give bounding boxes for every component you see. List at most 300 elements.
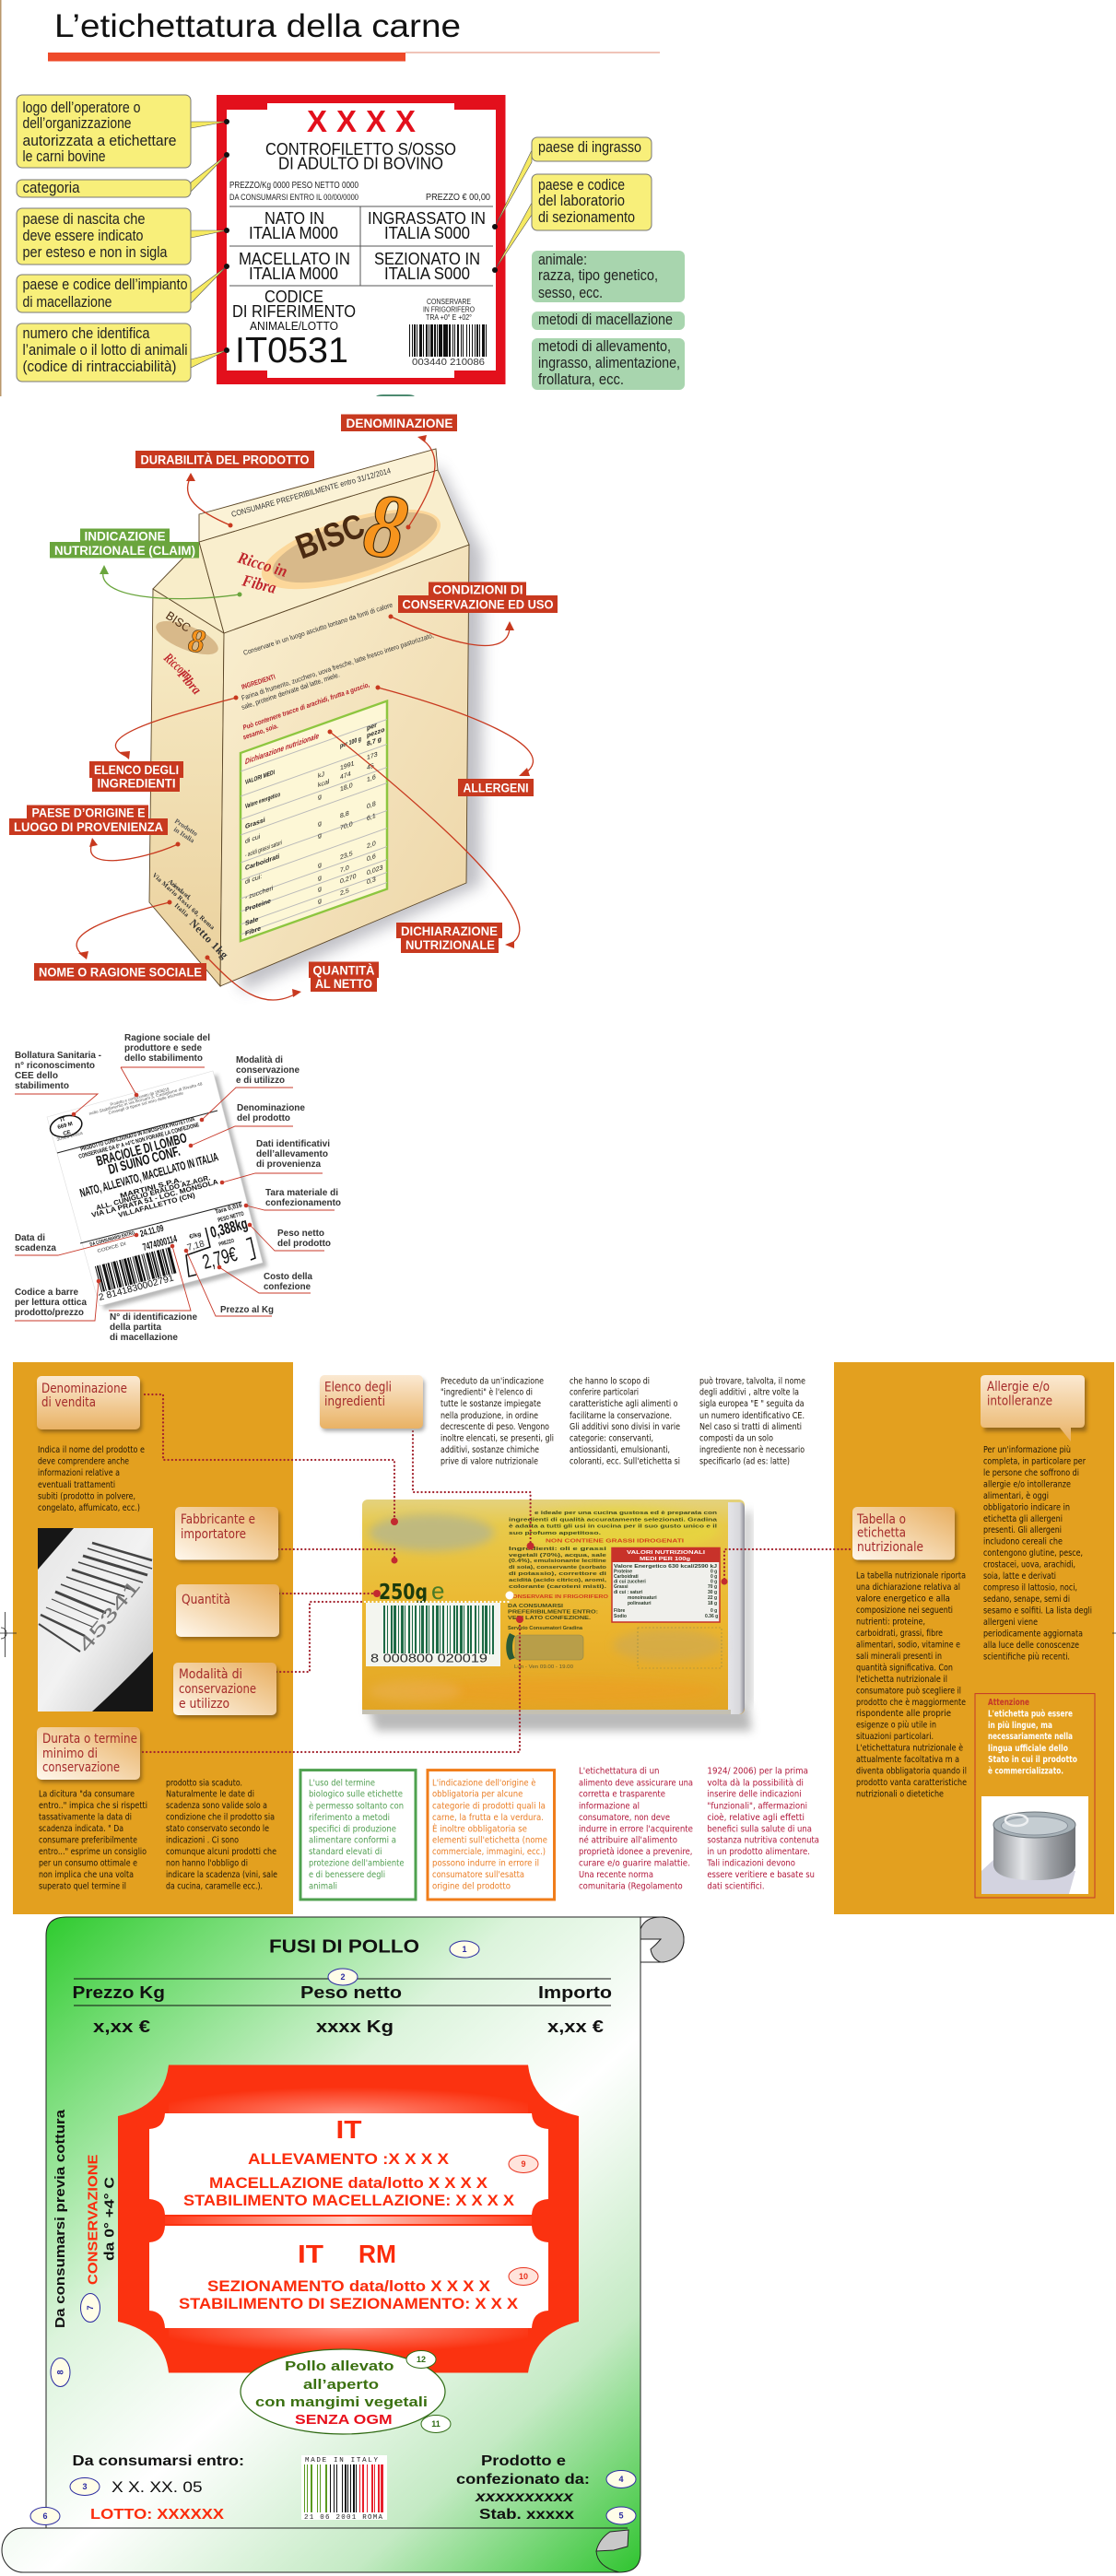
box: biologico: alimentare conformi a [309,1836,396,1846]
nutrition table on box: - acidi grassi saturi [245,838,282,859]
green note: metodi di allevamento: metodi di allevamento, [538,337,671,355]
annotation: costo [264,1271,312,1292]
text: ingredienti column 1: tutte le sostanze impiegate [441,1399,541,1409]
box: fabbricante: Fabbricante e [181,1512,255,1527]
text: tabella nutrizionale: rispondente alle proprie [856,1709,951,1719]
text: tabella nutrizionale: attualmente facoltativa m a [856,1755,959,1765]
text: durata column 1: superato quel termine il [39,1882,126,1891]
annotation: modalità: Modalità di [236,1054,283,1065]
beef label card: CONSERVARE [427,298,471,306]
annotated label sheet: IT [60,1117,66,1123]
box: biologico: è permesso soltanto con [309,1801,404,1812]
text: etichettatura red column 1: Una recente norma [579,1870,653,1880]
side logo and side text: Ricco in [160,651,195,684]
beef label card: 003440 210086 [412,358,485,368]
box: fabbricante [175,1507,280,1562]
label: paese d'origine [9,806,168,835]
label: quantità al netto: QUANTITÀ [313,964,375,977]
product package photo: colorante (caroteni misti). [509,1584,607,1590]
text: etichettatura red column 2: in un prodotto alimentare. [707,1847,810,1857]
title: L’etichettatura della carne [54,8,461,44]
green note: animale: sesso, ecc. [538,284,603,301]
annotated label sheet: Consegli di tipare sul retro delle etichette [108,1090,184,1115]
product package photo: 30 g [708,1590,717,1595]
product package photo: 70 g [708,1584,717,1590]
product package photo: 0 g [711,1608,717,1614]
annotated label sheet: 24.11.09 [139,1223,165,1240]
numbered badges [30,1941,636,2525]
box: origine: origine del prodotto [432,1882,511,1891]
numbered badges: 11 [431,2419,441,2429]
box: allergie: Allergie e/o [987,1380,1050,1394]
box: attenzione: necessariamente nella [988,1732,1073,1742]
text: ingredienti column 1: "ingredienti" è l'elenco di [441,1388,533,1397]
expiry and lot: X X. XX. 05 [112,2478,203,2496]
label: nome o ragione sociale: NOME O RAGIONE SOCIALE [39,966,202,979]
text: denominazione: congelato, affumicato, ecc.) [38,1503,140,1513]
box drawing [149,449,469,986]
text: etichettatura red column 2: benefici sulla salute di una [707,1824,812,1834]
annotation: modalità [236,1054,300,1086]
text: ingredienti column 1: prive di valore nutrizionale [441,1457,538,1467]
text: ingredienti column 3: ingrediente non è necessario [699,1445,805,1455]
text: allergie: obbligatorio indicare in [983,1502,1070,1512]
annotated label sheet: 7,18 [186,1239,206,1253]
beef label card: IT0531 [235,331,348,371]
text: etichettatura red column 2: sostanza nutritiva contenuta [707,1836,819,1846]
text: allergie: periodicamente aggiornata [983,1629,1083,1639]
box: origine: elementi sull'etichetta (nome [432,1836,547,1846]
label: elenco degli ingredienti: ELENCO DEGLI [94,763,179,777]
producer: Prodotto e [481,2453,566,2469]
label: elenco degli ingredienti [89,761,183,792]
product package photo: di cui zuccheri [614,1580,646,1585]
annotation: bollatura sanitaria: CEE dello [15,1070,58,1081]
numbered badges: 9 [521,2159,526,2169]
product package photo: acidità (acido citrico), aromi, [509,1578,607,1583]
panel: beef label with callouts [17,95,685,390]
product package photo: vegetali (70%), acqua, sale [509,1553,606,1559]
nutrition table on box: 1,6 [367,772,376,783]
text: etichettatura red column 1: indurre in errore l'acquirente [579,1824,693,1834]
green note: metodi di allevamento [532,337,685,390]
box: tabella nutrizionale: Tabella o [856,1512,906,1527]
numbered badges: 2 [340,1972,346,1982]
panel: sezionamento: SEZIONAMENTO data/lotto X X X X [207,2278,490,2295]
yellow callout: logo: autorizzata a etichettare [22,132,177,149]
text: etichettatura red column 1: L'etichettatura di un [579,1766,660,1777]
annotated label sheet: 0,388kg [208,1215,250,1241]
table headers and values [72,1983,612,2036]
nutrition table on box: 2,5 [340,886,349,898]
product package photo: 0 g [711,1574,717,1580]
text: ingredienti column 3: composti da un solo [699,1434,773,1444]
label: denominazione: DENOMINAZIONE [347,417,453,430]
nutrition table on box: per 100 g [340,735,361,750]
brand logo: Ricco in [235,547,289,581]
label: indicazione nutrizionale: INDICAZIONE [85,529,166,544]
expiry and lot [72,2453,244,2523]
text: etichettatura red column 2: volta dà la possibilità di [707,1779,804,1789]
product package photo: ingredienti di qualità accuratamente selezionati. Gradina [509,1517,718,1523]
box: biologico: animali [309,1882,337,1891]
white dotted connector over product [365,1601,510,1603]
nutrition table on box: g [318,896,322,905]
yellow callout: categoria [17,155,227,197]
numbered badges: 5 [618,2511,624,2520]
text: durata column 2 [166,1779,277,1891]
box: origine: carne, la frutta e la verdura. [432,1813,544,1823]
text: tabella nutrizionale: l'etichetta nutrizionale il [856,1675,947,1685]
annotated label sheet: ALL. CUNIGLIO ERALDO AZ.AGR. [95,1173,211,1212]
nutrition table on box: Carboidrati [245,852,279,872]
text: durata column 1: tassativamente la data di [39,1812,132,1823]
expiry and lot: LOTTO: XXXXXX [90,2507,224,2523]
text: durata column 2: da cucina, caramelle ecc.). [166,1882,263,1891]
plate divider [165,2217,532,2224]
nutrition table on box: per [367,721,377,732]
box: durata: conservazione [42,1760,120,1775]
text: tabella nutrizionale: La tabella nutrizionale riporta [856,1571,966,1582]
text: etichettatura red column 1: comunitaria (Regolamento [579,1882,683,1891]
text: durata column 2: indicazioni . Ci sono [166,1836,239,1846]
nutrition table on box: Sale [245,914,258,927]
product package photo: di cui : saturi [614,1590,643,1595]
text: allergie [983,1445,1092,1662]
product package photo: Valore Energetico 630 kcal/2590 kJ [614,1564,717,1570]
nutrition table on box: 45 [367,761,374,771]
box: elenco degli ingredienti [320,1375,425,1431]
panel: chicken label scroll [2,1917,684,2572]
brand logo [235,472,449,606]
annotation: denominazione: del prodotto [237,1112,290,1123]
box: attenzione: lingua ufficiale dello [988,1744,1068,1754]
annotation: dati allevamento: dell’allevamento [256,1148,328,1159]
brand logo: Fibra [240,570,278,597]
label: paese d'origine: LUOGO DI PROVENIENZA [14,820,163,834]
green note: metodi di allevamento: frollatura, ecc. [538,371,624,388]
label: quantità al netto [309,962,379,992]
beef label card: DA CONSUMARSI ENTRO IL 00/00/0000 [229,193,358,202]
yellow callout: logo: le carni bovine [22,147,105,165]
annotated label sheet: 2 8141830002791 [98,1273,175,1303]
nutrition table on box: g [318,873,322,882]
text: tabella nutrizionale: nutrizionali o dietetiche [856,1790,944,1799]
text: tabella nutrizionale: nutrienti: proteine, [856,1617,925,1628]
annotated label sheet: NATO, ALLEVATO, MACELLATO IN ITALIA [78,1149,220,1200]
yellow callout: categoria: categoria [22,179,80,196]
box: durata [37,1727,142,1782]
yellow callout: laboratorio di sezionamento: del laboratorio [538,192,625,209]
yellow callout: numero di rintracciabilità: l’animale o il lotto di animali [22,341,188,359]
text: ingredienti column 1: nella produzione, in ordine [441,1411,538,1421]
nutrition table on box: 70,0 [340,819,353,832]
text: ingredienti column 1: inoltre elencati, se presenti, gli [441,1434,554,1444]
yellow callout: paese di ingrasso: paese di ingrasso [538,138,641,156]
side logo and side text: Via Mario Rossi 60, Roma [151,872,217,932]
box: biologico: specifici di produzione [309,1824,396,1834]
beef label card: ITALIA S000 [384,224,470,242]
text: ingredienti column 2: conferire particolari [570,1388,639,1397]
panel: sezionamento [149,2226,548,2328]
front face text: sesamo, soia. [241,722,279,741]
annotated label sheet: CODICE DI [97,1241,126,1254]
text: durata column 2: indicare la scadenza (vini, sale [166,1870,277,1880]
label: condizioni di conservazione [398,582,558,613]
box: durata: Durata o termine [42,1732,137,1747]
box: origine [428,1770,555,1900]
text: ingredienti column 3: degli additivi , altre volte la [699,1388,799,1397]
product package photo: monoinsaturi [628,1595,657,1601]
nutrition table on box: 8,8 [340,808,349,820]
rotated storage text: CONSERVAZIONE [85,2155,101,2285]
annotated label sheet: VILLAFALLETTO (CN) [117,1191,196,1219]
text: durata column 2: comunque alcuni prodotti che [166,1847,276,1857]
annotated label sheet [47,1071,267,1310]
annotation: modalità: e di utilizzo [236,1075,285,1086]
left orange panel [13,1362,293,1914]
arrow heads and start dots [78,435,530,997]
annotation: data di scadenza [15,1232,56,1253]
table headers and values: Peso netto [300,1983,402,2002]
scroll shape [2,1917,684,2572]
table headers and values: Importo [538,1983,612,2002]
nutrition table on box: 7,0 [340,863,349,875]
text: ingredienti column 3: specificarlo (ad es: latte) [699,1457,790,1467]
annotated label sheet: 2,79€ [200,1242,240,1274]
text: ingredienti column 2: coloranti, ecc. Sull'etichetta si [570,1457,680,1467]
beef label card: CODICE [264,288,323,306]
label: allergeni: ALLERGENI [463,782,529,794]
text: allergie: etichetta gli allergeni [983,1514,1063,1524]
box shadow [230,465,483,992]
product package photo: Proteine [614,1569,632,1574]
oval claim [241,2349,445,2434]
beef label card: ITALIA M000 [249,224,338,242]
nutrition table on box: Grassi [245,816,265,830]
annotation: codice a barre: prodotto/prezzo [15,1307,84,1318]
box: attenzione: in più lingue, ma [988,1721,1052,1731]
annotated label sheet: 30925 Leuca [56,1131,84,1143]
text: etichettatura red column 2: essere veritiere e basate su [707,1870,815,1880]
yellow callout: paese di nascita: deve essere indicato [22,227,144,244]
text: allergie: presenti. Gli allergeni [983,1525,1062,1535]
box: quantità [176,1584,281,1640]
text: tabella nutrizionale: diventa obbligatoria quando il [856,1766,967,1777]
box: denominazione di vendita [37,1376,142,1432]
box: attenzione: L'etichetta può essere [988,1709,1073,1720]
text: ingredienti column 1: additivi, sostanze chimiche [441,1445,539,1455]
text: durata column 2: prodotto sia scaduto. [166,1779,242,1789]
text: etichettatura red column 2: 1924/ 2006) per la prima [707,1766,808,1777]
brand logo: 8 [357,472,415,580]
text: tabella nutrizionale: carboidrati, grassi, fibre [856,1629,943,1639]
panel: allevamento e macellazione: IT [335,2115,361,2144]
product package photo: 0 g [711,1569,717,1574]
text: tabella nutrizionale [856,1571,967,1799]
brand logo: BISC [290,506,370,566]
annotation: denominazione: Denominazione [237,1102,305,1113]
product package photo: (0.4%), emulsionante lecitine [509,1559,606,1564]
yellow callout: logo: dell’organizzazione [22,114,131,132]
text: allergie: compreso il lattosio, noci, [983,1583,1077,1593]
box: durata: minimo di [42,1747,98,1761]
nutrition table on box: 8,7 g [367,735,382,747]
annotated label sheet: €/kg [189,1231,202,1241]
annotation: costo: Costo della [264,1271,312,1282]
yellow callout: laboratorio di sezionamento: di sezionamento [538,208,635,226]
expiry and lot: Da consumarsi entro: [72,2453,244,2469]
numbered badges: 8 [55,2370,65,2375]
product package photo: VEDI LATO CONFEZIONE. [508,1616,592,1621]
product package photo: Carboidrati [614,1574,639,1580]
annotation dots [72,1093,252,1283]
side logo and side text: Azienda srl, [167,877,193,901]
product package photo: 8 000800 020019 [370,1652,488,1664]
nutrition table on box: Proteine [245,897,271,913]
text: allergie: sesamo e solfiti. La lista degli [983,1606,1092,1616]
annotated label sheet: PREZZO [218,1239,235,1248]
curved arrow: green [103,569,240,599]
text: etichettatura red column 1: corretta e trasparente [579,1790,665,1799]
box: elenco degli ingredienti: Elenco degli [324,1381,392,1395]
product package photo: NON CONTIENE GRASSI IDROGENATI [546,1539,685,1545]
nutrition table on box: VALORI MEDI [245,768,275,786]
green note: metodi di macellazione: metodi di macellazione [538,311,673,328]
text: ingredienti column 2: caratteristiche agli alimenti o [570,1399,678,1409]
text: durata column 1: non implica che una volta [39,1870,134,1880]
annotation: codice a barre: Codice a barre [15,1287,78,1298]
beef label card: PREZZO € 00,00 [426,192,490,203]
product package photo: CONSERVARE IN FRIGORIFERO [508,1594,609,1600]
panel: meat label with annotations [15,1032,341,1343]
annotation: tara [265,1187,341,1208]
text: etichettatura red column 1: né attribuire all'alimento [579,1836,677,1846]
label: paese d'origine: PAESE D’ORIGINE E [31,806,146,820]
producer: confezionato da: [456,2472,590,2488]
box: origine: È inoltre obbligatoria se [432,1823,527,1834]
green note: metodi di allevamento: ingrasso, alimentazione, [538,354,680,371]
text: etichettatura red column 1: proprietà idonee a prevenire, [579,1847,693,1857]
nutrition table on box: 2,0 [367,839,376,850]
panel: allevamento e macellazione: STABILIMENTO MACELLAZIONE: X X X X [183,2193,514,2209]
product package photo: 0 g [711,1580,717,1585]
side logo and side text: BISC [163,608,194,635]
numbered badges: 12 [417,2355,426,2364]
text: ingredienti column 3: può trovare, talvolta, il nome [699,1377,805,1387]
nutrition table on box [241,701,387,941]
box: elenco degli ingredienti: ingredienti [324,1394,385,1409]
product package photo: è adatta a tutti gli usi in cucina per il suo gusto unico e il [509,1524,718,1530]
annotation: dati allevamento: Dati identificativi [256,1138,330,1149]
box: tabella nutrizionale: etichetta [857,1526,906,1541]
text: tabella nutrizionale: sali minerali presenti in [856,1652,942,1662]
box: origine: L'indicazione dell'origine è [432,1779,536,1789]
box: fabbricante: importatore [181,1527,246,1542]
photo: barcode close-up [38,1528,153,1711]
annotation: costo: confezione [264,1281,311,1292]
beef label card: PREZZO/Kg 0000 PESO NETTO 0000 [229,181,358,191]
yellow callout: paese di nascita: paese di nascita che [22,210,146,228]
text: etichettatura red column 2: dati scientifici. [707,1882,765,1891]
annotation: codice a barre [15,1287,87,1318]
text: denominazione: informazioni relative a [38,1468,120,1478]
box: biologico [300,1770,416,1900]
callout pointer dots [224,119,498,353]
text: ingredienti column 2: facilitarne la conservazione. [570,1411,672,1421]
expiry text on flap: CONSUMARE PREFERIBILMENTE entro 31/12/2014 [230,465,392,519]
annotation: bollatura sanitaria: Bollatura Sanitaria - [15,1050,101,1061]
numbered badges: 7 [86,2305,95,2311]
annotation: numero partita: della partita [110,1322,161,1333]
box: attenzione [975,1694,1095,1898]
box: biologico: standard elevati di [309,1847,382,1857]
yellow callout: impianto di macellazione [17,266,227,312]
annotation: peso netto [277,1228,331,1249]
box: origine: consumatore sull'esatta [432,1870,524,1880]
product package photo: Ingredienti: oli e grassi [509,1547,607,1552]
product package photo: e [431,1577,444,1605]
beef label card: MACELLATO IN [239,250,350,268]
text: durata column 1: entro..." esprime un consiglio [39,1847,147,1857]
annotated label sheet: DA CONSUMARSI ENTRO [89,1230,135,1248]
label: quantità al netto: AL NETTO [315,977,372,991]
text: etichettatura red column 2: Tali indicazioni devono [707,1858,795,1869]
text: durata column 1: per un consumo ottimale e [39,1858,137,1869]
panel: sezionamento: RM [358,2240,396,2268]
barcode [301,2455,387,2522]
nutrition table on box: 1991 [340,759,355,772]
box: allergie [981,1375,1087,1441]
label: elenco degli ingredienti: INGREDIENTI [98,776,175,791]
side logo and side text: Fibra [173,666,204,698]
side logo and side text: Prodotto [173,817,200,838]
text: ingredienti column 3: un numero identificativo CE. [699,1411,805,1421]
annotation: bollatura sanitaria [15,1050,101,1091]
annotated label sheet: CE [63,1130,72,1137]
front face text: INGREDIENTI [241,673,276,691]
annotation: data di scadenza: Data di [15,1232,45,1243]
side logo and side text: Netto 1kg [187,916,230,961]
annotation: ragione sociale [124,1032,210,1064]
annotation leader lines [15,1067,335,1321]
front face text: Conservare in un luogo asciutto lontano da fonti di calore [242,601,394,657]
text: denominazione [38,1445,145,1513]
table headers and values: x,xx € [93,2017,150,2036]
text: ingredienti column 1: decrescente di peso. Vengono [441,1422,549,1432]
box: attenzione: è commercializzato. [988,1767,1063,1777]
yellow callout: laboratorio di sezionamento [495,174,652,270]
annotation: bollatura sanitaria: n° riconoscimento [15,1060,95,1071]
beef label card: ITALIA M000 [249,265,338,283]
label: dichiarazione nutrizionale: DICHIARAZIONE [401,924,498,938]
text: ingredienti column 2: antiossidanti, emulsionanti, [570,1445,670,1455]
text: ingredienti column 2: che hanno lo scopo di [570,1377,650,1387]
annotation: dati allevamento [256,1138,330,1170]
box: origine: possono indurre in errore il [432,1858,539,1869]
box: modalità di conservazione: e utilizzo [179,1697,229,1711]
annotated label sheet: PRODOTTO CONFEZIONATO IN ATMOSFERA PROTETTIVA [80,1116,195,1153]
nutrition table on box: g [318,830,322,840]
panel: allevamento e macellazione: MACELLAZIONE data/lotto X X X X [209,2175,488,2192]
product package photo: Sodio [614,1614,627,1619]
beef label card: IN FRIGORIFERO [423,306,475,313]
text: allergie: contengono glutine, pesce, [983,1548,1083,1559]
yellow callout: paese di nascita: per esteso e non in sigla [22,243,168,261]
nutrition table on box: g [318,792,322,801]
product package photo: DA CONSUMARSI [508,1604,564,1609]
text: allergie: alimentari, è oggi [983,1491,1049,1501]
